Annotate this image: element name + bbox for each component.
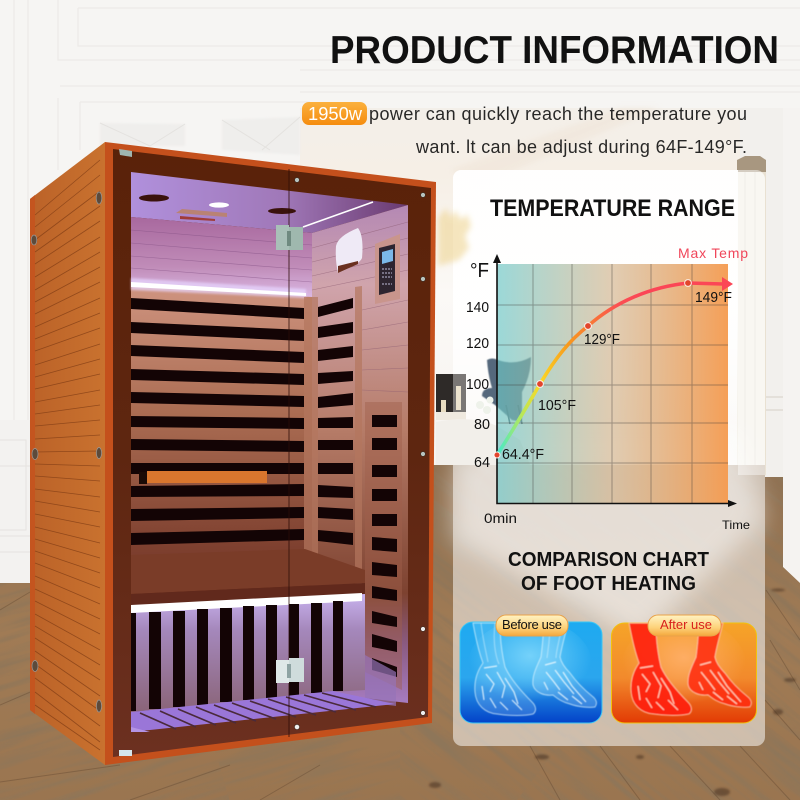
icon: cold feet (473, 623, 596, 716)
y axis labels: 140 (466, 299, 489, 316)
after use label: After use (660, 617, 712, 632)
background decor seen through panel (436, 208, 531, 465)
heater (336, 228, 362, 273)
front frame (105, 142, 436, 765)
backrest (139, 471, 267, 484)
y axis labels (466, 260, 490, 471)
after use card (612, 615, 756, 723)
after use label (648, 615, 721, 636)
power badge: 1950w (308, 104, 363, 124)
foot heating heading: OF FOOT HEATING (521, 573, 696, 595)
axes (493, 254, 737, 507)
wood floor (0, 465, 800, 800)
before use label (496, 615, 568, 636)
door seam (288, 169, 290, 737)
top glass clip (119, 149, 132, 157)
right wall (304, 205, 408, 703)
title: PRODUCT INFORMATION (330, 29, 779, 72)
x axis labels (484, 510, 750, 532)
before use card (460, 615, 602, 723)
back wall (131, 217, 312, 560)
top hinge (276, 225, 303, 250)
bottom glass clip (119, 750, 132, 756)
data labels: 149°F (695, 290, 732, 306)
y axis labels: °F (470, 260, 489, 282)
max temp label: Max Temp (678, 245, 748, 261)
side wall (30, 142, 105, 765)
sauna cabin (30, 142, 436, 765)
x axis labels: 0min (484, 510, 517, 526)
data labels: 105°F (538, 398, 576, 414)
data labels: 64.4°F (502, 447, 544, 463)
under bench lit area (131, 593, 396, 732)
bottom hinge (276, 658, 304, 683)
white info panel (453, 170, 765, 746)
power description text block: power can quickly reach the temperature you (369, 104, 747, 124)
data labels (502, 290, 732, 463)
temperature curve (497, 277, 733, 455)
power description text block (302, 102, 747, 157)
x axis labels: Time (722, 518, 750, 532)
y axis labels: 64 (474, 454, 490, 471)
glass screws (294, 178, 425, 730)
temperature line chart (466, 245, 750, 532)
power description text block: want. lt can be adjust during 64F-149°F. (415, 137, 747, 157)
bench (131, 549, 365, 606)
foot heating heading: COMPARISON CHART (508, 549, 709, 571)
data points (494, 280, 691, 458)
foot heating heading (508, 549, 709, 595)
control panel (375, 234, 400, 304)
before use label: Before use (502, 617, 562, 632)
data labels: 129°F (584, 332, 620, 348)
icon: warm feet (629, 623, 751, 716)
temperature range heading: TEMPERATURE RANGE (490, 195, 735, 222)
y axis labels: 120 (466, 335, 489, 352)
plot area (497, 264, 728, 503)
ceiling (131, 172, 408, 233)
y axis labels: 80 (474, 416, 490, 433)
y axis labels: 100 (466, 376, 489, 393)
